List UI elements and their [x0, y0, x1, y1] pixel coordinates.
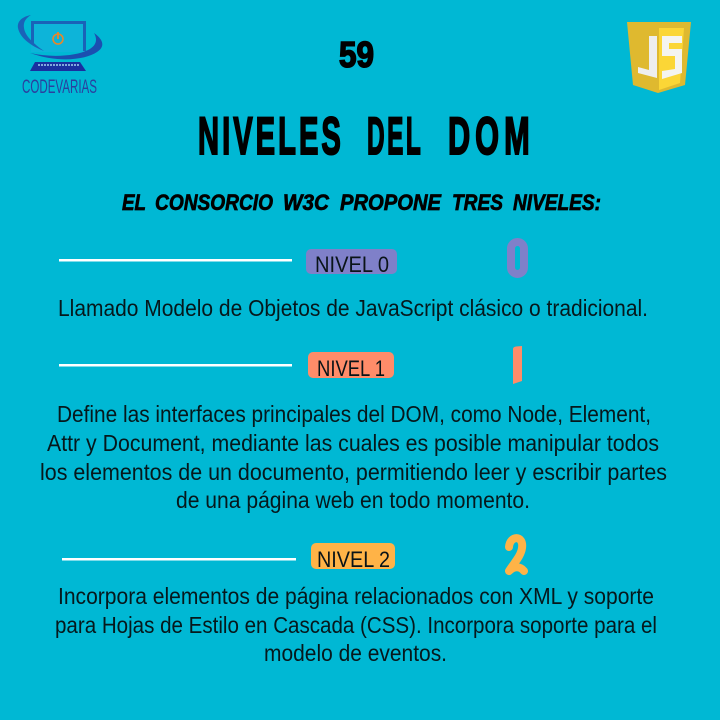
logo: Codevarias: CODEVARIAS [22, 77, 97, 98]
badge: nivel 2: NIVEL 2 [317, 547, 390, 572]
badge: nivel 0: NIVEL 0 [315, 252, 389, 277]
subtitle: W3C [283, 190, 330, 215]
description nivel 1: de una página web en todo momento. [176, 487, 530, 513]
numeral 0 [511, 242, 524, 274]
logo: Codevarias [18, 15, 102, 98]
subtitle: NIVELES: [513, 190, 601, 215]
title: DEL [367, 106, 423, 166]
description nivel 1: Define las interfaces principales del DOM, como Node, Element, [57, 401, 651, 427]
section: nivel 1 [40, 346, 667, 513]
icon: JavaScript shield [627, 22, 691, 93]
title [198, 106, 535, 166]
subtitle [122, 190, 601, 215]
description nivel 1: Attr y Document, mediante las cuales es posible manipular todos [47, 430, 659, 456]
description nivel 2: modelo de eventos. [264, 640, 447, 666]
page number: 59 [339, 34, 374, 75]
numeral 1 [513, 346, 522, 384]
title: NIVELES [198, 107, 344, 166]
power symbol [53, 32, 63, 44]
section: nivel 0 [58, 242, 648, 321]
description nivel 1 [40, 401, 667, 513]
description nivel 0: Llamado Modelo de Objetos de JavaScript clásico o tradicional. [58, 295, 648, 321]
numeral 2 [509, 538, 524, 571]
description nivel 1: los elementos de un documento, permitiendo leer y escribir partes [40, 459, 667, 485]
section: nivel 2 [55, 538, 657, 666]
subtitle: CONSORCIO [155, 190, 273, 215]
badge: nivel 1: NIVEL 1 [317, 356, 385, 381]
title: DOM [448, 108, 535, 166]
subtitle: EL [122, 190, 146, 215]
subtitle: PROPONE [340, 190, 442, 215]
description nivel 2 [55, 583, 657, 666]
description nivel 2: Incorpora elementos de página relacionados con XML y soporte [58, 583, 654, 609]
subtitle: TRES [452, 190, 503, 215]
